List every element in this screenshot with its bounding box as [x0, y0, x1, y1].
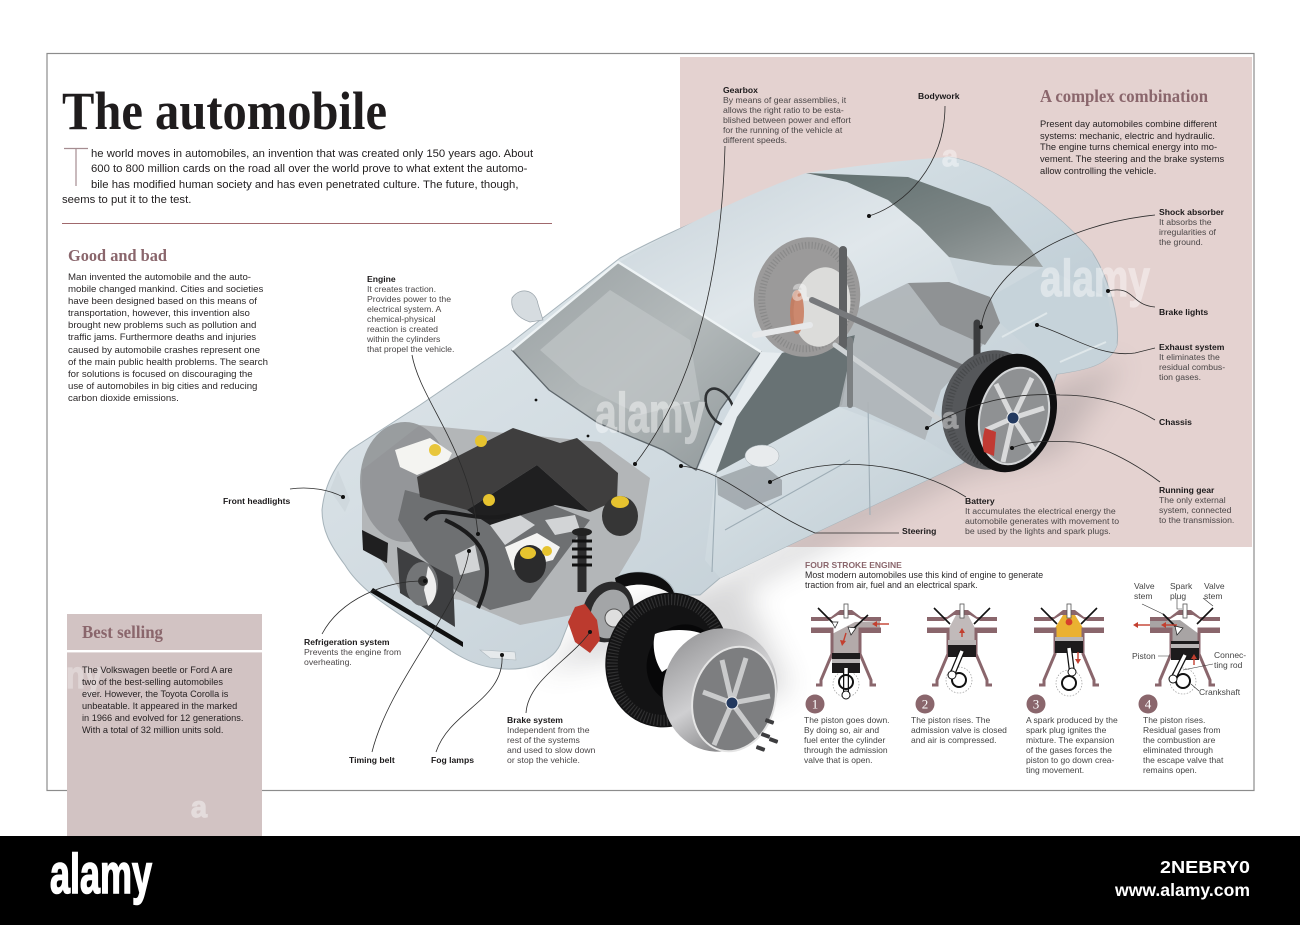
label: running gear: to the transmission. [1159, 515, 1234, 525]
label: shock absorber: irregularities of [1159, 227, 1217, 237]
label: battery: Battery [965, 496, 995, 506]
watermark: small a trunk: a [942, 140, 958, 173]
divider [62, 223, 552, 224]
label: running gear: The only external [1159, 495, 1226, 505]
interior seen through windshield [540, 290, 700, 415]
radiator fan [406, 562, 438, 606]
watermark: best selling fragment: ny [66, 655, 102, 697]
panel: four stroke engine [804, 560, 1246, 775]
label: brake system: or stop the vehicle. [507, 755, 580, 765]
step 1: valve that is open. [804, 755, 873, 765]
labels: engine parts [1132, 581, 1246, 697]
label: brake system: and used to slow down [507, 745, 596, 755]
step 1: fuel enter the cylinder [804, 735, 885, 745]
engine machinery [398, 490, 590, 610]
right mirror [745, 445, 779, 467]
label: refrigeration system: Refrigeration system [304, 637, 390, 647]
step 1: through the admission [804, 745, 888, 755]
steering wheel [700, 384, 740, 430]
watermark: centre: alamy [595, 381, 705, 444]
text: complex combination: allow controlling the vehicle. [1040, 166, 1156, 176]
label: timing belt: Timing belt [349, 755, 395, 765]
leader lines [290, 106, 1160, 752]
roof [620, 173, 960, 353]
left mirror [512, 291, 543, 322]
title: The automobile [62, 81, 387, 141]
engine bay [362, 425, 650, 625]
watermark: small a spare wheel: a [792, 274, 808, 307]
fog lamp [480, 650, 516, 660]
intro text: bile has modified human society and has even penetrated culture. The future, though, [91, 179, 518, 191]
front suspension spring [572, 528, 592, 592]
text: best selling: ever. However, the Toyota Corolla is [82, 689, 229, 699]
loose tyre [588, 576, 746, 744]
step 4: The piston rises. [1143, 715, 1205, 725]
black reservoir [514, 545, 552, 583]
front light strip [330, 470, 350, 512]
step 3: spark plug ignites the [1026, 725, 1107, 735]
intro text: 600 to 800 million cards on the road all over the world prove to what extent the automo- [91, 163, 528, 175]
rear moulding [1002, 313, 1106, 362]
watermark: right: alamy [1040, 250, 1150, 308]
rear arch x-ray [908, 282, 1000, 345]
label: brake system: Brake system [507, 715, 563, 725]
text: best selling: With a total of 32 million units sold. [82, 725, 223, 735]
label: engine: reaction is created [367, 324, 438, 334]
outer frame [47, 54, 1254, 790]
text: good and bad: brought new problems such as pollution and [68, 320, 256, 331]
car illustration [322, 157, 1125, 765]
step 4: eliminated through [1143, 745, 1213, 755]
labels: engine parts: ting rod [1214, 660, 1243, 670]
label: brake lights: Brake lights [1159, 307, 1208, 317]
front grille [362, 530, 388, 563]
step 3: ting movement. [1026, 765, 1084, 775]
label: chassis: Chassis [1159, 417, 1192, 427]
trunk [806, 157, 1108, 300]
watermark: best selling a: a [191, 791, 207, 824]
diagram: stroke 1 [811, 604, 889, 699]
brake caliper [568, 604, 600, 653]
label: engine: electrical system. A [367, 304, 442, 314]
labels: engine parts: Valve [1134, 581, 1155, 591]
rear window [806, 173, 1043, 267]
label: engine: that propel the vehicle. [367, 344, 454, 354]
engine cover [417, 428, 618, 512]
text: good and bad: carbon dioxide emissions. [68, 393, 179, 404]
footer logo: alamy [50, 842, 152, 905]
label: gearbox: blished between power and effort [723, 115, 851, 125]
text: best selling: two of the best-selling automobiles [82, 677, 223, 687]
front left wheel arch tyre [360, 422, 450, 542]
label: exhaust system: residual combus- [1159, 362, 1225, 372]
label: exhaust system: Exhaust system [1159, 342, 1225, 352]
yellow cap top [475, 435, 487, 447]
text: good and bad: mobile changed mankind. Cities and societies [68, 284, 263, 295]
labels: engine parts: stem [1204, 591, 1222, 601]
text: best selling: The Volkswagen beetle or Ford A are [82, 665, 233, 675]
footer image id: 2NEBRY0 [1160, 857, 1250, 877]
label: exhaust system: tion gases. [1159, 372, 1201, 382]
spare wheel [744, 229, 870, 365]
label: battery: be used by the lights and spark plugs. [965, 526, 1111, 536]
step 3: 3 [1033, 696, 1039, 712]
watermark: small a rear door: a [942, 402, 958, 435]
step 2 [911, 694, 1007, 745]
label: shock absorber: Shock absorber [1159, 207, 1225, 217]
yellow cap [483, 494, 495, 506]
label: engine: Engine [367, 274, 396, 284]
footer band [0, 836, 1300, 925]
label: gearbox: By means of gear assemblies, it [723, 95, 847, 105]
step 4: remains open. [1143, 765, 1197, 775]
silver machinery highlights [455, 512, 580, 575]
text: best selling: unbeatable. It appeared in the marked [82, 701, 237, 711]
label: exhaust system: It eliminates the [1159, 352, 1220, 362]
label: engine: within the cylinders [366, 334, 441, 344]
drop cap [64, 148, 88, 186]
brake disc [574, 574, 642, 650]
label: brake system: rest of the systems [507, 735, 581, 745]
text: good and bad: traffic jams. Furthermore deaths and injuries [68, 332, 256, 343]
leader dots [341, 214, 1110, 657]
intro text: he world moves in automobiles, an invention that was created only 150 years ago. About [91, 148, 534, 160]
yellow cap [429, 444, 441, 456]
step 3 [1026, 694, 1118, 775]
step 3: mixture. The expansion [1026, 735, 1114, 745]
label: fog lamps: Fog lamps [431, 755, 474, 765]
diagram: stroke 3 [1034, 604, 1104, 696]
wheel arch [615, 572, 675, 597]
radiator [397, 547, 455, 627]
text: complex combination: vement. The steering and the brake systems [1040, 154, 1225, 164]
label: bodywork: Bodywork [918, 91, 960, 101]
text: complex combination: Present day automobiles combine different [1040, 119, 1217, 129]
labels: engine parts: Crankshaft [1199, 687, 1241, 697]
labels: engine parts: Spark [1170, 581, 1193, 591]
label: refrigeration system: Prevents the engine from [304, 647, 401, 657]
step 3: A spark produced by the [1026, 715, 1118, 725]
panel: pink background [680, 57, 1252, 547]
heading: good and bad: Good and bad [68, 246, 167, 265]
label: gearbox: for the running of the vehicle at [723, 125, 843, 135]
car body [322, 157, 1118, 669]
label: gearbox: Gearbox [723, 85, 758, 95]
step 2: admission valve is closed [911, 725, 1007, 735]
front bumper strip [370, 588, 463, 647]
label: brake system: Independent from the [507, 725, 590, 735]
label: battery: It accumulates the electrical energy the [965, 506, 1116, 516]
label: shock absorber: the ground. [1159, 237, 1203, 247]
car shadow [540, 360, 1125, 720]
diagram: stroke 2 [927, 604, 997, 693]
label: front headlights: Front headlights [223, 496, 291, 506]
rear x-ray interior [782, 282, 1000, 440]
step 1: The piston goes down. [804, 715, 890, 725]
label: gearbox: allows the right ratio to be esta- [723, 105, 844, 115]
heading: four stroke engine: FOUR STROKE ENGINE [805, 560, 902, 570]
text: good and bad: for solutions is focused on discouraging the [68, 369, 253, 380]
rear wheel [932, 342, 1069, 482]
step 4 [1138, 694, 1224, 775]
text: complex combination: systems: mechanic, electric and hydraulic. [1040, 131, 1215, 141]
step 1: 1 [812, 696, 818, 712]
text: four stroke intro: Most modern automobiles use this kind of engine to generate [805, 570, 1043, 580]
door line [712, 402, 870, 572]
heading: best selling: Best selling [82, 622, 163, 642]
step 4: the escape valve that [1143, 755, 1224, 765]
text: complex combination: The engine turns chemical energy into mo- [1040, 142, 1217, 152]
heading: complex combination: A complex combination [1040, 86, 1208, 106]
text: good and bad: have been designed based on this means of [68, 296, 257, 307]
label: refrigeration system: overheating. [304, 657, 352, 667]
windshield frame highlight [512, 262, 761, 352]
label: engine: Provides power to the [367, 294, 451, 304]
labels: engine parts: Connec- [1214, 650, 1246, 660]
text: good and bad: caused by automobile crashes represent one [68, 345, 260, 356]
rear suspension [755, 250, 977, 420]
footer url: www.alamy.com [1114, 880, 1250, 900]
step 3: of the gases forces the [1026, 745, 1112, 755]
washer tank [395, 438, 452, 475]
A pillar [698, 352, 782, 474]
labels: engine parts: Piston [1132, 651, 1156, 661]
text: good and bad: Man invented the automobile and the auto- [68, 272, 251, 283]
text: best selling: in 1966 and evolved for 12 generations. [82, 713, 243, 723]
step 4: 4 [1145, 696, 1152, 712]
windshield [512, 262, 761, 470]
spherical reservoir [602, 496, 638, 536]
label: engine: It creates traction. [367, 284, 436, 294]
diagram: stroke 4 [1133, 598, 1220, 694]
labels: engine parts: stem [1134, 591, 1152, 601]
loose rim [649, 615, 791, 765]
step 3: piston to go down crea- [1026, 755, 1115, 765]
hoses [425, 512, 510, 608]
step 4: the combustion are [1143, 735, 1216, 745]
step 2: 2 [922, 696, 928, 712]
step 2: The piston rises. The [911, 715, 990, 725]
text: good and bad: of the main public health problems. The search [68, 357, 268, 368]
text: four stroke intro: traction from air, fuel and an electrical spark. [805, 580, 978, 590]
door side panel [705, 407, 963, 578]
label: running gear: system, connected [1159, 505, 1232, 515]
step 1 [804, 694, 890, 765]
white brake fluid tank [505, 533, 560, 570]
label: engine: chemical-physical [367, 314, 436, 324]
panel: best selling [66, 614, 262, 836]
step 2: and air is compressed. [911, 735, 997, 745]
intro text: seems to put it to the test. [62, 194, 191, 206]
label: battery: automobile generates with movement to [965, 516, 1119, 526]
text: good and bad: use of automobiles in big cities and reducing [68, 381, 257, 392]
step 4: Residual gases from [1143, 725, 1220, 735]
engine dark block [467, 465, 590, 525]
battery box [717, 462, 782, 510]
label: gearbox: different speeds. [723, 135, 787, 145]
rear quarter panel [990, 267, 1117, 374]
labels: engine parts: plug [1170, 591, 1186, 601]
label: running gear: Running gear [1159, 485, 1215, 495]
wheel bolts [756, 718, 778, 752]
labels: engine parts: Valve [1204, 581, 1225, 591]
label: steering: Steering [902, 526, 936, 536]
label: shock absorber: It absorbs the [1159, 217, 1212, 227]
step 1: By doing so, air and [804, 725, 879, 735]
text: good and bad: transportation, however, this invention also [68, 308, 250, 319]
side window [716, 335, 855, 473]
